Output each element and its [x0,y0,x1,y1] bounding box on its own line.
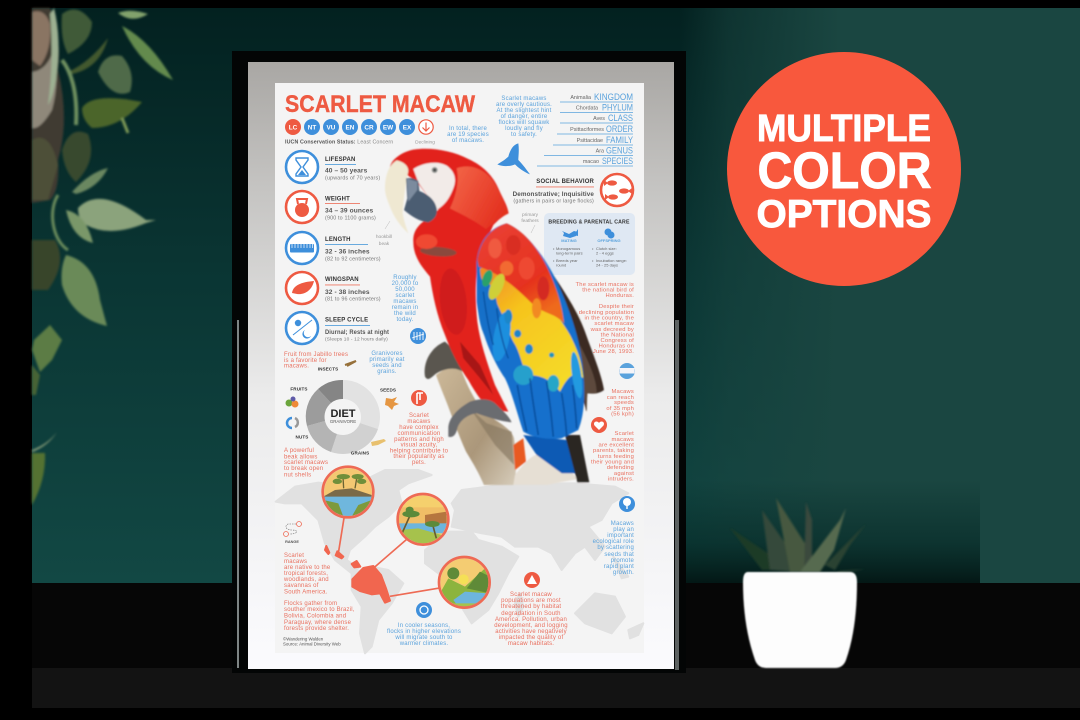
fact: parenting: macaws [612,437,634,443]
habitat text: Scarlet [284,553,304,559]
fact: flight speed: (56 kph) [611,412,634,418]
taxonomy table: Animalia [570,95,591,101]
diet labels and food icons: NUTS [296,434,308,440]
taxonomy table [537,91,634,166]
fact: national bird of Honduras: scarlet macaw [594,321,635,327]
donut chart: diet: DIET [330,408,356,420]
stat: lifespan [286,151,380,183]
diet notes: Granivores [371,351,403,357]
habitat text: Paraguay, where dense [284,620,352,626]
range icon and label: RANGE [285,540,299,544]
fact: overly cautious: Scarlet macaws [501,96,547,102]
habitat text: woodlands, and [283,577,329,583]
panel: breeding and parental care: Incubation range: [596,258,627,263]
taxonomy table: KINGDOM [594,91,633,102]
fact: flight speed: can reach [607,395,634,401]
fact: national bird of Honduras: June 28, 1993. [593,349,634,355]
fact: overly cautious: of danger, entire [501,114,548,120]
icon: Honduras flag [619,363,635,379]
fact: communication: their popularity as [393,454,445,460]
social behavior [513,174,633,206]
fact: threats [494,572,568,647]
habitat text: macaws [284,559,307,565]
fact: parenting: are excellent [599,442,634,448]
conservation status badges [285,119,435,146]
fact: parenting: parents, taking [593,448,634,454]
panel: breeding and parental care: • [553,258,555,263]
beak [385,160,408,233]
map land masses [276,470,643,653]
conservation status badges: EN [346,124,355,131]
stat: length: LENGTH [325,237,351,243]
fact: powerful beak: scarlet macaws [284,460,328,466]
fact: national bird of Honduras: declining population [579,310,634,316]
fact: seasonal migration: In cooler seasons, [398,623,450,629]
callout badge: multiple color options [727,52,961,286]
stat: lifespan: 40 – 50 years [325,168,368,174]
panel: breeding and parental care: 24 - 25 days [596,262,618,268]
stat: sleep cycle: SLEEP CYCLE [325,318,368,324]
fact: ecological role [593,496,635,576]
fact: ecological role: promote [611,558,634,564]
fact: communication: visual acuity, [401,442,437,448]
donut chart: diet: GRANIVORE [330,419,356,424]
donut chart: diet [306,380,380,454]
fact: parenting: intruders. [608,476,634,482]
panel: breeding and parental care: 2 - 4 eggs [596,250,614,256]
facts: population in the wild: scarlet [395,293,415,299]
hanging plant leaves [32,8,173,505]
poster sheet [275,83,644,653]
panel: breeding and parental care: • [553,246,555,251]
fact: species count: are 19 species [447,132,489,138]
fact: ecological role: Macaws [611,521,634,527]
habitat text: souther mexico to Brazil, [284,607,355,613]
diet labels and food icons: INSECTS [318,366,338,372]
taxonomy table: Chordata [576,106,598,112]
wing feather detail [475,235,585,437]
habitat text: Flocks gather from [284,601,337,607]
habitat text: Bolivia, Colombia and [284,614,346,620]
stat: length: (82 to 92 centimeters) [325,256,381,262]
facts: population in the wild: Roughly [393,275,417,281]
fact: national bird of Honduras: Honduras. [605,293,634,299]
stat: lifespan: LIFESPAN [325,157,355,163]
panel: breeding and parental care: Monogamous [556,246,580,251]
fact: threats: Scarlet macaw [510,592,552,598]
taxonomy table: PHYLUM [602,102,633,112]
conservation status badges: EW [383,124,394,131]
fact: flight speed: of 35 mph [606,406,634,412]
taxonomy table: FAMILY [606,134,634,145]
taxonomy table: SPECIES [602,155,633,166]
diet labels and food icons: GRAINS [351,450,369,456]
fact: communication: macaws [407,419,431,425]
fact: parenting: against [614,471,634,477]
label: hookbill beak: hookbill [376,234,392,240]
taxonomy table: Aves [593,116,605,122]
conservation status badges: NT [308,124,316,131]
succulent plant [730,498,866,574]
icon: blue flying bird [497,143,530,174]
fact: overly cautious: loudly and fly [505,126,543,132]
stat: weight [286,191,376,223]
fact: seasonal migration [387,602,461,647]
conservation status badges: VU [327,124,336,131]
title: SCARLET MACAW [285,91,475,118]
connector lines [338,516,440,596]
fact: ecological role: by scattering [597,545,634,551]
habitat text: savannas of [284,583,319,589]
taxonomy table: Ara [596,148,604,154]
conservation status badges: CR [364,124,374,131]
credits: ©Wandering Walden [283,636,324,642]
panel: breeding and parental care: long-term pairs [556,250,583,256]
fact: powerful beak: A powerful [284,448,314,454]
fact: overly cautious: flocks will squawk [499,120,550,126]
stat: wingspan: 32 - 38 inches [325,289,370,296]
fact: ecological role: rapid plant [604,564,634,570]
facts: population in the wild: macaws [393,299,417,305]
parrot photograph illustration on perch [385,149,604,485]
diet notes: seeds and [372,363,402,369]
fact: threats: degradation in South [501,611,561,617]
habitat scene: valley river [440,558,488,606]
fact: threats: threatened by habitat [501,604,561,610]
stat: length [286,232,381,264]
fact: communication: Scarlet [409,413,429,419]
fact: ecological role: growth. [613,570,634,576]
habitat text: South America. [284,590,328,596]
habitat text: forests provide shelter. [284,626,349,632]
body and head red mass [390,149,509,412]
fact: national bird of Honduras: Honduras on [599,344,634,350]
credits: Source: Animal Diversity Web [283,642,341,646]
fact: communication: patterns and high [394,437,444,443]
diet labels and food icons: FRUITS [290,386,308,392]
fact: national bird of Honduras: the national bird of [582,288,634,294]
diet notes [284,351,405,375]
fact: seasonal migration: warmer climates. [399,641,448,647]
callout badge: multiple color options: MULTIPLE [757,108,931,150]
wing yellow band [480,267,583,392]
stat: wingspan [286,272,381,304]
fact: threats: America. Pollution, urban [495,617,567,623]
stat: sleep cycle [286,312,390,344]
fact: threats: activities have negatively [495,629,567,635]
diet labels and food icons: SEEDS [380,388,396,392]
facts: population in the wild: the wild [394,311,416,317]
fact: national bird of Honduras: Despite their [599,304,634,310]
fact: parenting [591,417,634,482]
fact: national bird of Honduras: was decreed by [590,327,634,333]
conservation status badges: Declining [415,140,435,146]
panel: breeding and parental care [544,213,635,275]
picture frame and mat [232,51,686,673]
taxonomy table: GENUS [606,144,633,156]
label: primary feathers [521,212,539,233]
stat: lifespan: (upwards of 70 years) [325,176,380,182]
taxonomy table: Psittaciformes [570,127,604,133]
stat: length: 32 - 36 inches [325,248,370,256]
habitat text: are native to the [284,565,331,571]
stat: weight: WEIGHT [325,196,350,202]
diet notes: is a favorite for [284,358,327,364]
panel: breeding and parental care: OFFSPRING [597,238,621,243]
taxonomy table: Psittacidae [577,138,603,144]
white facial patch [413,163,455,210]
fact: overly cautious: to safety. [511,132,537,138]
fact: species count: In total, there [449,126,487,132]
fact: communication: have complex [399,425,439,431]
dark outer primaries [540,255,604,412]
fact: seasonal migration: flocks in higher elevations [387,629,461,635]
label: primary feathers: primary [522,212,539,218]
fact: national bird of Honduras: Congress of [601,338,634,344]
callout badge: multiple color options: COLOR [758,142,932,199]
fact: overly cautious: At the slightest hint [497,108,552,114]
fact: national bird of Honduras: The scarlet macaw is [576,282,634,288]
panel: breeding and parental care: Clutch size: [596,246,617,251]
facts: population in the wild: 20,000 to [392,281,419,287]
diet labels and food icons [286,361,399,456]
fact: ecological role: seeds that [604,552,634,558]
facts: population in the wild [392,275,426,344]
diet notes: grains. [377,369,397,375]
fact: ecological role: play an [613,527,634,533]
conservation status badges: LC [289,124,298,131]
range icon and label [284,522,302,544]
habitat scene: palm lagoon [324,468,372,516]
stat: weight: 34 – 39 ounces [325,208,374,214]
fact: ecological role: ecological role [593,539,634,545]
panel: breeding and parental care: MATING [561,238,577,243]
fact: parenting: defending [607,465,634,471]
fact: threats: populations are most [501,598,561,604]
fact: seasonal migration: will migrate south to [394,635,453,641]
stat: sleep cycle: (Sleeps 10 - 12 hours daily) [325,336,388,342]
fact: powerful beak: beak allows [284,454,318,460]
stat: wingspan: (81 to 96 centimeters) [325,296,381,302]
taxonomy table: macao [583,159,599,165]
fact: threats: development, and logging [494,623,568,629]
talons [448,399,512,437]
conservation status badges: IUCN Conservation Status: Least Concern [285,140,393,146]
diet notes: Fruit from Jabillo trees [284,352,348,358]
panel: breeding and parental care: Breeds year [556,258,578,263]
fact: species count: of macaws. [452,138,484,144]
fact: parenting: Scarlet [615,431,634,437]
habitat scene: waterfall cliff [399,496,447,544]
label: primary feathers: feathers [521,218,539,224]
conservation status badges: EX [403,124,412,131]
diet notes: macaws. [284,364,309,370]
social behavior: SOCIAL BEHAVIOR [536,179,595,185]
fact: communication: helping contribute to [390,448,449,454]
fact: overly cautious: are overly cautious. [496,102,552,108]
wing red coverts [477,223,564,323]
fact: flight speed: Macaws [612,389,634,395]
white pot [743,572,857,668]
callout badge: multiple color options: OPTIONS [756,193,932,236]
world map with range and habitat scenes [276,466,643,653]
scarlet macaw range [325,546,390,603]
label: hookbill beak: beak [379,241,390,247]
fact: communication: pets. [412,460,426,466]
panel: breeding and parental care: • [592,258,594,263]
social behavior: (gathers in pairs or large flocks) [513,198,594,204]
fact: threats: macaw habitats. [508,641,554,647]
facts: population in the wild: today. [396,317,414,323]
fact: powerful beak: nut shells [284,472,311,478]
fact: national bird of Honduras: in the country, the [585,316,634,322]
stat: wingspan: WINGSPAN [325,277,359,283]
perch [425,342,577,485]
fact: powerful beak: to break open [284,466,323,472]
wing blue base [477,223,584,439]
stat: sleep cycle: Diurnal; Rests at night [325,329,390,336]
fact: communication [390,390,449,466]
facts: population in the wild: remain in [392,305,418,311]
habitat text: tropical forests, [284,571,328,577]
diet notes: primarily eat [369,357,405,363]
fact: parenting: turns feeding [598,454,634,460]
label: hookbill beak [376,221,392,247]
taxonomy table: CLASS [608,112,633,123]
panel: breeding and parental care: • [592,246,594,251]
fact: parenting: their young and [591,460,634,466]
panel: breeding and parental care: BREEDING & PARENTAL CARE [548,220,630,226]
social behavior: Demonstrative; Inquisitive [513,191,594,198]
taxonomy table: ORDER [606,123,633,134]
panel: breeding and parental care: round [556,262,566,268]
stat: weight: (900 to 1100 grams) [325,216,376,222]
fact: flight speed: speeds [614,400,634,406]
fact: communication: communication [398,431,440,437]
facts: population in the wild: 50,000 [395,287,415,293]
fact: threats: impacted the quality of [499,635,563,641]
fact: ecological role: important [607,533,634,539]
tail [513,435,589,482]
fact: national bird of Honduras: the National [601,332,634,338]
